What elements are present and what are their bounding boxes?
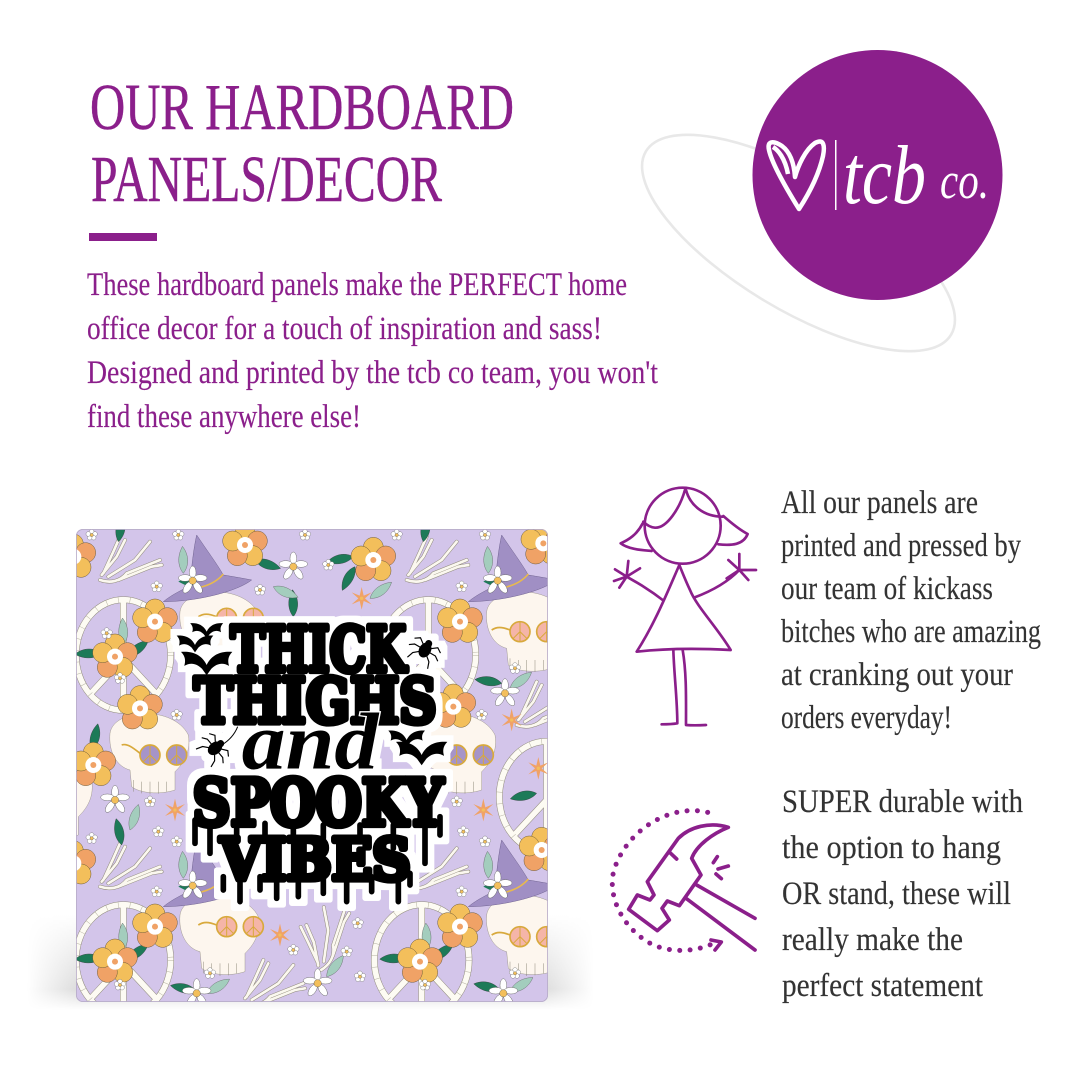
slogan sticker: thick thighs and spooky vibes: VIBES [219,827,411,893]
feature text: team: orders everyday! [781,700,952,736]
spider top right [403,633,445,671]
slogan sticker: thick thighs and spooky vibes: THICK [231,613,408,686]
title: OUR HARDBOARD [90,71,514,144]
logo heart icon [769,141,824,209]
slogan sticker: thick thighs and spooky vibes [177,613,447,902]
intro paragraph [87,267,658,435]
intro paragraph: office decor for a touch of inspiration and sass! [87,311,602,347]
feature text: durability: OR stand, these will [782,876,1011,912]
title: PANELS/DECOR [91,143,442,216]
title accent bar [89,233,157,241]
spider left with thread [193,727,238,771]
slogan sticker: thick thighs and spooky vibes: SPOOKY [193,766,444,840]
intro paragraph: Designed and printed by the tcb co team, you won't [87,355,658,391]
logo wordmark: co. [940,153,989,210]
logo swoosh ring [611,94,986,392]
feature text: durability: perfect statement [782,968,983,1004]
feature text: durability: the option to hang [782,830,1001,866]
feature text: durability: really make the [782,922,963,958]
feature text: team [781,485,1041,736]
intro paragraph: find these anywhere else! [87,399,361,435]
icon: hammer with dotted arc [612,811,755,950]
bats right [388,731,447,765]
panel shadow [40,932,582,1005]
bats top left [177,623,232,675]
logo wordmark: tcb [843,129,926,222]
feature text: team: at cranking out your [781,657,1013,693]
title [90,71,514,216]
logo badge [752,50,1002,300]
slogan sticker: thick thighs and spooky vibes: and [242,698,379,786]
paint drips [195,817,440,902]
feature text: durability [782,784,1023,1004]
product panel: hardboard print [76,529,548,1002]
feature text: team: our team of kickass [781,571,993,607]
panel background and pattern [76,529,548,1002]
feature text: team: printed and pressed by [781,528,1021,564]
slogan sticker: thick thighs and spooky vibes: THIGHS [194,665,437,738]
feature text: team: All our panels are [781,485,978,521]
logo divider [835,140,836,210]
feature text: durability: SUPER durable with [782,784,1023,820]
icon: stick figure girl [614,488,756,725]
intro paragraph: These hardboard panels make the PERFECT home [87,267,627,303]
